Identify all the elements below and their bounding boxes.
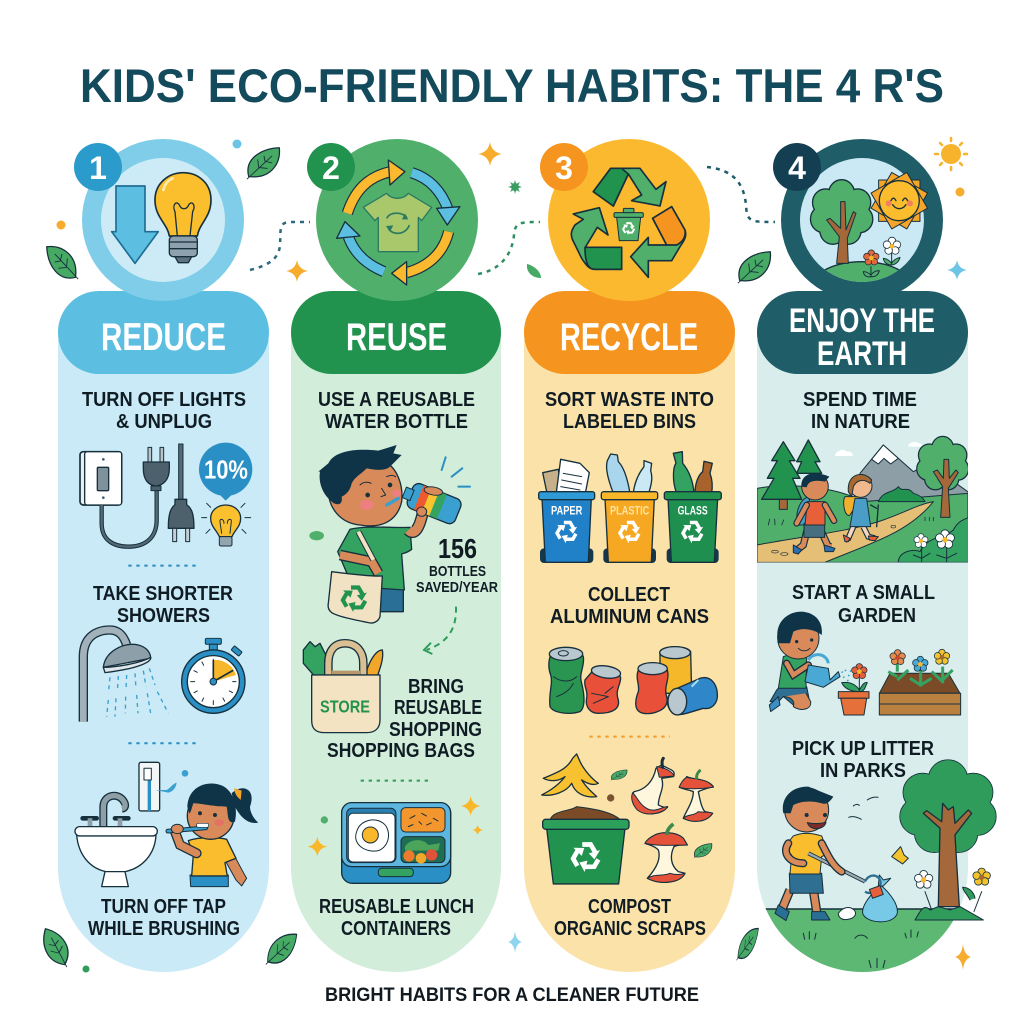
heading: enjoy the earth — [789, 302, 935, 373]
icon: shower and stopwatch — [83, 630, 245, 722]
icon: tree, sun, flowers — [800, 158, 928, 282]
icon: shirt in reuse arrows — [337, 160, 460, 285]
inner circle — [101, 158, 225, 282]
column body — [58, 340, 269, 972]
text: turn off tap: WHILE BRUSHING — [88, 918, 240, 940]
icon: recycling arrows and bin — [571, 168, 686, 277]
illustration: paper, plastic, glass bins: PLASTIC — [610, 504, 650, 517]
text: take shorter showers: SHOWERS — [117, 605, 210, 627]
header: reduce — [58, 291, 269, 374]
illustration: compost bin and food scraps — [542, 754, 713, 884]
text: turn off lights: TURN OFF LIGHTS — [82, 389, 246, 411]
text: reusable lunch containers: REUSABLE LUNCH — [319, 896, 474, 918]
panel: reuse — [291, 139, 501, 972]
number badge 3 — [540, 143, 588, 191]
text: spend time in nature: SPEND TIME — [803, 389, 917, 411]
heading: reuse: REUSE — [346, 316, 447, 359]
icon: sink and girl brushing teeth — [75, 762, 258, 887]
text: pick up litter in parks: PICK UP LITTER — [792, 738, 935, 760]
arrow: dashed to shopping bag — [424, 607, 456, 654]
heading: enjoy the earth: ENJOY THE — [789, 302, 935, 340]
stat: 156 bottles saved per year: 156 — [438, 533, 477, 564]
text: bring reusable shopping bags: REUSABLE — [394, 697, 482, 719]
text: turn off lights: & UNPLUG — [116, 411, 212, 433]
text: turn off lights — [82, 389, 246, 433]
text: pick up litter in parks: IN PARKS — [820, 760, 906, 782]
circle badge: reuse — [316, 139, 478, 301]
illustration: crushed cans — [549, 647, 717, 737]
illustration: store tote bag — [303, 642, 383, 733]
number badge 3: 3 — [555, 150, 573, 186]
heading: recycle: RECYCLE — [560, 316, 698, 359]
text: reusable lunch containers — [319, 896, 474, 940]
text: start a small garden: START A SMALL — [792, 582, 935, 604]
number badge 4 — [773, 143, 821, 191]
illustration: tree, boy picking up litter — [775, 760, 996, 939]
illustration: paper, plastic, glass bins — [539, 452, 721, 563]
stat: 156 bottles saved per year: SAVED/YEAR — [416, 579, 498, 596]
header: recycle — [524, 291, 735, 374]
stat: 156 bottles saved per year — [416, 533, 498, 596]
text: collect aluminum cans: COLLECT — [588, 584, 670, 606]
text: use a reusable water bottle: USE A REUSABLE — [318, 389, 475, 411]
text: sort waste into labeled bins: LABELED BINS — [563, 411, 696, 433]
text: compost organic scraps: COMPOST — [588, 896, 671, 918]
text: use a reusable water bottle — [318, 389, 475, 433]
text: start a small garden: GARDEN — [838, 605, 916, 627]
column body — [757, 340, 968, 972]
circle badge: reduce — [82, 139, 244, 301]
stat: 156 bottles saved per year: BOTTLES — [429, 563, 486, 580]
number badge 1: 1 — [89, 150, 107, 186]
illustration: store tote bag: STORE — [320, 697, 370, 717]
panel: recycle — [524, 139, 735, 972]
column body — [291, 340, 501, 972]
circle badge: enjoy the earth — [781, 139, 943, 301]
text: compost organic scraps — [554, 896, 706, 940]
number badge 2: 2 — [322, 150, 340, 186]
circle badge: recycle — [548, 139, 710, 301]
icon: switch, plugs and 10% bulb: 10% — [204, 454, 248, 484]
illustration: paper, plastic, glass bins: PAPER — [551, 504, 583, 517]
column body — [524, 340, 735, 972]
header: enjoy the earth — [757, 291, 968, 374]
text: take shorter showers — [93, 583, 233, 627]
illustration: lunch box — [307, 781, 483, 883]
text: bring reusable shopping bags — [327, 676, 482, 762]
text: reusable lunch containers: CONTAINERS — [341, 918, 451, 940]
text: compost organic scraps: ORGANIC SCRAPS — [554, 918, 706, 940]
ground inside panel — [766, 908, 954, 972]
text: spend time in nature — [803, 389, 917, 433]
lower grass tufts — [869, 958, 885, 968]
decorative connectors and sparkles — [36, 138, 971, 972]
icon: switch, plugs and 10% bulb — [80, 443, 252, 743]
text: start a small garden — [792, 582, 935, 627]
number badge 2 — [307, 143, 355, 191]
header: reuse — [291, 291, 501, 374]
text: pick up litter in parks — [792, 738, 935, 782]
illustration: boy watering plants — [769, 612, 961, 715]
title: KIDS' ECO-FRIENDLY HABITS: THE 4 R'S — [80, 59, 944, 112]
icon: arrow and light bulb — [112, 173, 211, 263]
text: use a reusable water bottle: WATER BOTTLE — [325, 411, 468, 433]
panel: enjoy the earth — [757, 139, 996, 979]
text: sort waste into labeled bins — [545, 389, 714, 433]
text: collect aluminum cans — [550, 584, 709, 628]
number badge 1 — [74, 143, 122, 191]
text: bring reusable shopping bags: BRING — [408, 676, 464, 698]
text: spend time in nature: IN NATURE — [811, 411, 910, 433]
illustration: kids hiking on a trail — [757, 437, 970, 562]
number badge 4: 4 — [788, 150, 806, 186]
heading: reduce: REDUCE — [101, 316, 226, 359]
text: bring reusable shopping bags: SHOPPING BAGS — [327, 740, 475, 762]
text: turn off tap — [88, 896, 240, 940]
illustration: paper, plastic, glass bins: GLASS — [678, 504, 708, 517]
footer tagline: BRIGHT HABITS FOR A CLEANER FUTURE — [325, 985, 699, 1006]
text: turn off tap: TURN OFF TAP — [101, 896, 226, 918]
text: sort waste into labeled bins: SORT WASTE INTO — [545, 389, 714, 411]
heading: enjoy the earth: EARTH — [817, 335, 907, 373]
illustration: boy drinking with tote bag — [309, 445, 470, 623]
panel: reduce — [58, 139, 269, 972]
text: bring reusable shopping bags: SHOPPING — [389, 719, 482, 741]
text: collect aluminum cans: ALUMINUM CANS — [550, 606, 709, 628]
text: take shorter showers: TAKE SHORTER — [93, 583, 233, 605]
